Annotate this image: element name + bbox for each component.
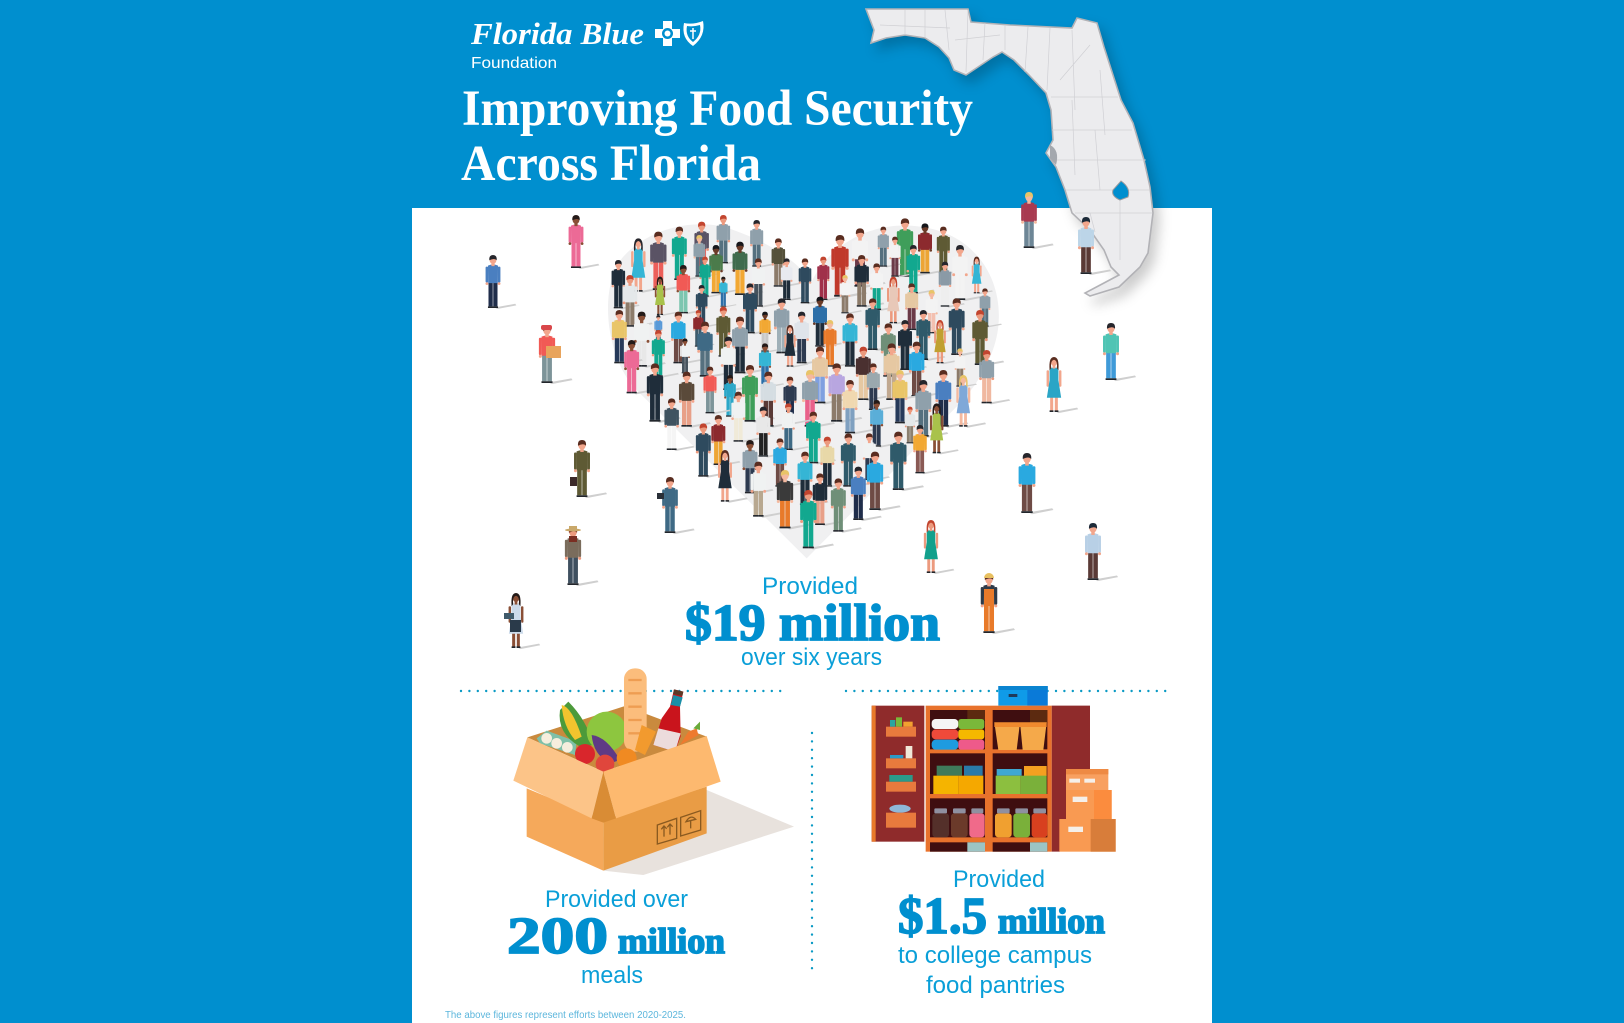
eggs: [537, 731, 577, 755]
towels: [932, 719, 984, 750]
figure: man in cyan shirt: [1019, 453, 1053, 514]
figure: construction worker: [981, 573, 1015, 634]
footnote: The above figures represent efforts between 2020-2025.: [445, 1010, 686, 1021]
stat: 1.5 million: food pantries: [926, 972, 1065, 999]
stat: 19 million: over six years: [741, 644, 882, 671]
corn and leaves: [560, 702, 593, 747]
baguette: [624, 668, 647, 752]
illustration: heart of people: [608, 215, 1010, 558]
green bins and boxes: [996, 766, 1047, 794]
map: Florida: [866, 9, 1153, 296]
stat: 1.5 million: $1.5: [898, 888, 987, 945]
stat: 19 million: Provided: [762, 573, 858, 600]
figure: woman with tablet: [504, 593, 540, 649]
panel: white content area: [412, 208, 1212, 1023]
illustration: grocery box: [513, 668, 794, 875]
lettuce: [587, 712, 627, 752]
figure: person taking selfie: [1103, 323, 1136, 381]
figure: olive suit with briefcase: [570, 440, 607, 498]
box faces: [527, 788, 603, 871]
stat: 19 million: [685, 573, 940, 671]
logo: Florida Blue Foundation: [470, 16, 704, 72]
tomatoes: [575, 744, 614, 773]
figure: blonde woman: [1021, 192, 1054, 249]
top storage box: [998, 686, 1048, 706]
figure: pink nurse: [569, 215, 599, 269]
figure: farmer: [565, 526, 599, 586]
logo: Florida Blue Foundation: Foundation: [471, 55, 557, 72]
stat: 19 million: $19 million: [685, 595, 940, 652]
figure: woman in green top: [924, 520, 954, 574]
stat: 200 million meals: meals: [581, 962, 643, 989]
stat: 200 million meals: 200: [507, 908, 608, 965]
figure: woman in pale blue top: [1085, 523, 1118, 581]
right door: [1052, 706, 1090, 852]
figure: flight attendant: [1047, 357, 1078, 413]
stat: 1.5 million: Provided: [953, 866, 1045, 893]
box handling icons: [657, 811, 701, 844]
figure: man in blue suit: [657, 477, 695, 534]
stat: 200 million meals: [507, 886, 725, 989]
cheese: [635, 725, 656, 755]
lake Okeechobee: [1113, 181, 1129, 200]
figure: delivery person with box: [539, 325, 573, 384]
stat: 1.5 million: million: [998, 901, 1105, 941]
illustration: pantry cabinet: [872, 686, 1116, 852]
left door: [872, 706, 924, 842]
dotted dividers: [461, 691, 1170, 974]
title: Improving Food Security: [462, 81, 973, 137]
eggplant: [592, 735, 620, 763]
figure: police woman: [486, 255, 516, 309]
figure: woman by map: [1078, 217, 1111, 275]
storage baskets: [994, 722, 1047, 750]
jars: [932, 808, 1047, 837]
cabinet shelves: [926, 706, 1052, 852]
title: [461, 81, 973, 192]
stat: 200 million meals: Provided over: [545, 886, 688, 913]
yellow bins and bottles: [933, 766, 983, 794]
stat: 200 million meals: million: [618, 921, 725, 961]
stacked cardboard boxes: [1059, 769, 1116, 852]
logo: Florida Blue Foundation: Florida Blue: [470, 16, 644, 51]
heart shape: [608, 224, 999, 558]
title: Across Florida: [461, 136, 761, 192]
stat: 1.5 million: to college campus: [898, 942, 1092, 969]
carrot: [680, 728, 698, 745]
stat: 1.5 million: [898, 866, 1105, 999]
wine bottle: [653, 689, 683, 752]
crowd: [612, 215, 1010, 549]
